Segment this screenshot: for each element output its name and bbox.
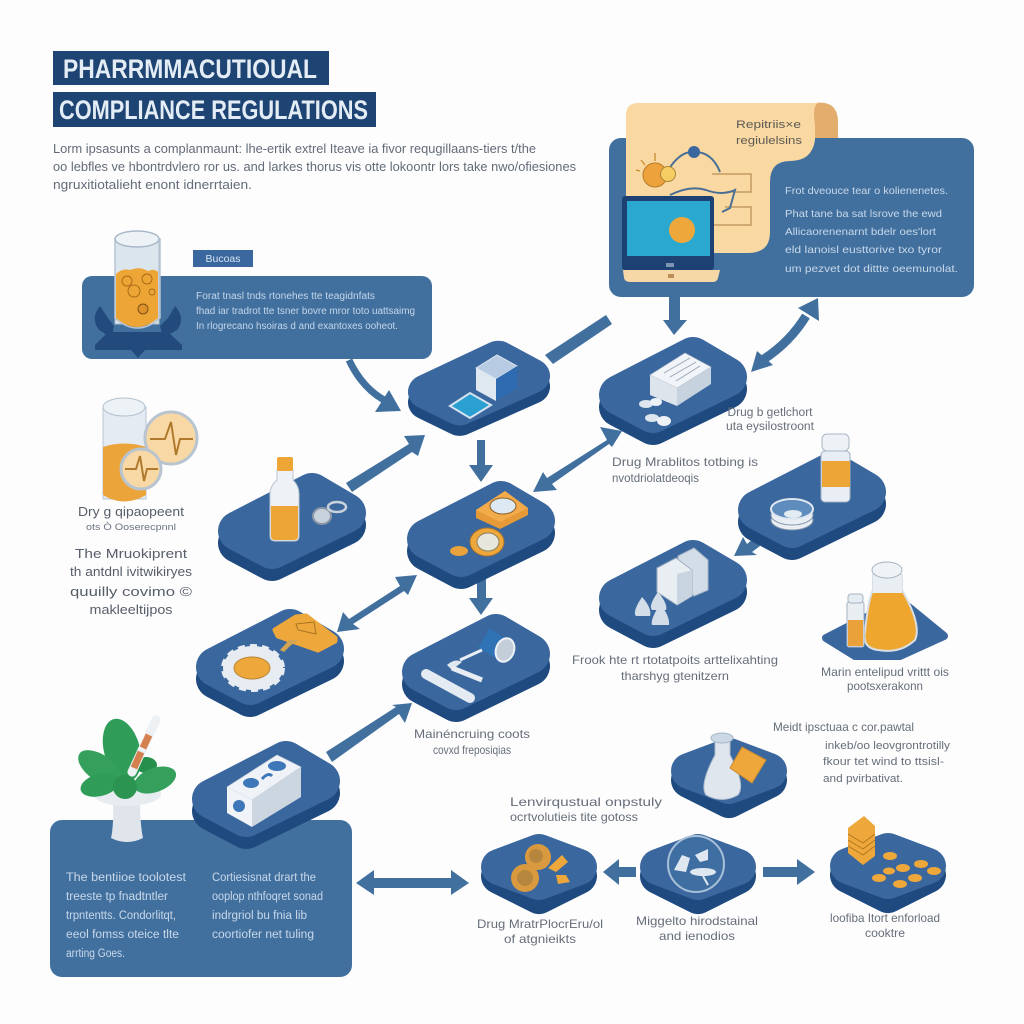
label: meidt: Meidt ipsctuaa c cor.pawtal	[773, 720, 914, 734]
panel: bottom left description: trpntentts. Condorlitqt,	[66, 910, 176, 922]
scroll paper: regiulelsins	[736, 135, 803, 147]
tile: stack and tablets	[848, 816, 941, 895]
label: environmental: Lenvirqustual onpstuly	[510, 795, 662, 809]
label: meidt: and pvirbativat.	[823, 773, 903, 785]
label: meidt	[773, 720, 951, 785]
tile: flask and label	[689, 733, 769, 800]
arrow: regulations panel down	[663, 297, 687, 335]
arrow: right tile to packages tile	[734, 537, 760, 556]
panel text: In rlogrecano hsoiras d and exantoxes ooheot.	[196, 321, 398, 332]
panel: bottom left description: eeol fomss oteice tlte	[66, 929, 179, 941]
intro paragraph: oo lebfles ve hbontrdvlero ror us. and larkes thorus vis otte lokoontr lors take nwo/ofiesiones	[53, 159, 576, 174]
arrow: gear tile double arrow	[337, 575, 417, 632]
label: drug material: of atgnieikts	[504, 932, 576, 946]
label: drug metabolites	[612, 455, 758, 485]
scroll paper: Repitriis×e	[736, 119, 801, 131]
label: drug material: Drug MratrPlocrEru/ol	[477, 917, 603, 931]
illustration: vial and coins	[103, 398, 197, 502]
panel text: Frot dveouce tear o kolienenetes.	[785, 185, 948, 197]
label: environmental	[510, 795, 662, 824]
label: manufacturing costs: Mainéncruing coots	[414, 727, 530, 741]
arrows	[326, 297, 819, 895]
label: miggelto	[636, 914, 758, 943]
label: marin	[821, 665, 949, 693]
label: drug metabolites: nvotdriolatdeoqis	[612, 471, 699, 485]
illustration: plant on pedestal	[72, 714, 180, 842]
label: drug batch: uta eysilostroont	[726, 421, 815, 433]
intro paragraph: Lorm ipsasunts a complanmaunt: lhe-ertik extrel Iteave ia fivor requgillaans-tiers t/the	[53, 141, 536, 156]
tile: centre with tablets	[427, 491, 535, 569]
text: drug component: makleeltijpos	[90, 602, 173, 617]
arrow: mid to right tile	[763, 859, 815, 885]
panel text: Phat tane ba sat lsrove the ewd	[785, 208, 942, 220]
panel: beaker callout	[82, 231, 432, 359]
intro paragraph: ngruxitiotalieht enont idnerrtaien.	[53, 177, 252, 192]
label: meidt: inkeb/oo leovgrontrotilly	[825, 740, 951, 752]
arrow: top right connector	[545, 315, 612, 364]
arrow: panel double horizontal	[356, 870, 469, 895]
panel text: Allicaorenenarnt bdelr oes'lort	[785, 226, 936, 238]
label: drug batch: Drug b getlchort	[728, 407, 813, 419]
label: drug batch	[726, 407, 815, 433]
tile: cookies	[499, 844, 579, 896]
label: meidt: fkour tet wind to ttsisl-	[823, 756, 944, 768]
panel: bottom left description: treeste tp fnadtntler	[66, 891, 168, 903]
label: drug metabolites: Drug Mrablitos totbing is	[612, 455, 758, 469]
scroll paper	[626, 103, 838, 253]
panel text	[785, 185, 958, 275]
label: marin: pootsxerakonn	[847, 679, 923, 693]
label: manufacturing costs	[414, 727, 530, 757]
text: drug component: The Mruokiprent	[75, 546, 187, 561]
tag: Bucoas	[193, 250, 253, 267]
tile: packages	[619, 548, 727, 628]
label: loofiba: loofiba Itort enforload	[830, 911, 940, 925]
label: loofiba: cooktre	[865, 926, 905, 940]
text: drug component	[70, 505, 193, 617]
label: manufacturing costs: covxd freposiqias	[433, 743, 511, 757]
title: PHARRMMACUTIOUAL	[63, 54, 317, 84]
arrow: regulations double arrow	[751, 298, 819, 372]
icon: large coin	[145, 412, 197, 464]
arrow: beaker panel to top tile	[349, 360, 401, 412]
label: tools: Frook hte rt rtotatpoits arttelixahting	[572, 653, 778, 667]
tile: top right with document box	[619, 353, 727, 426]
intro paragraph	[53, 141, 576, 192]
tile: canister and tube	[422, 634, 530, 702]
label: miggelto: and ienodios	[659, 929, 735, 943]
tile: magnifier circle	[658, 836, 738, 896]
text: drug component: th antdnl ivitwikiryes	[70, 564, 193, 579]
panel: bottom left description: coortiofer net tuling	[212, 929, 314, 941]
tile: bottle	[238, 457, 346, 561]
panel: bottom left description	[50, 820, 352, 977]
arrow: box tile to lower tile	[326, 703, 412, 762]
text: drug component: quuilly covimo ©	[70, 584, 193, 599]
label: loofiba	[830, 911, 940, 940]
panel text: um pezvet dot dittte oeemunolat.	[785, 263, 958, 275]
panel text: eld lanoisl eusttorive txo tyror	[785, 244, 943, 256]
panel: bottom left description: Cortiesisnat drart the	[212, 872, 316, 884]
tile: gear and tag	[216, 616, 335, 697]
arrow: top tile down	[469, 440, 493, 482]
icon: small coin	[121, 449, 161, 489]
panel: bottom left description: ooplop nthfoqret sonad	[212, 891, 323, 903]
text: drug component: ots Ò Ooserecpnnl	[86, 522, 176, 533]
panel text: Forat tnasl tnds rtonehes tte teagidnfats	[196, 291, 375, 302]
label: drug material	[477, 917, 603, 946]
panel text: fhad iar tradrot tte tsner bovre mror toto uattsaimg	[196, 306, 415, 317]
panel: bottom left description: The bentiioe toolotest	[66, 872, 187, 884]
panel: regulations with paper and laptop	[609, 103, 974, 297]
tile: right with jar and plates	[758, 434, 866, 540]
tile: top centre with cube	[427, 355, 531, 418]
label: tools	[572, 653, 778, 683]
arrow: centre tile down	[469, 578, 493, 615]
icon: small vial	[847, 594, 864, 647]
tile: flat flask base	[826, 562, 944, 656]
tag: Bucoas: Bucoas	[205, 253, 241, 265]
arrow: bottle tile to top tile	[346, 435, 425, 492]
arrow: centre double to right	[533, 427, 622, 492]
text: drug component: Dry g qipaopeent	[78, 505, 185, 519]
label: marin: Marin entelipud vrittt ois	[821, 665, 949, 679]
icon: laptop	[622, 196, 720, 282]
title	[53, 51, 376, 127]
icon: large flask	[865, 562, 917, 651]
arrow: mid to left tile	[603, 859, 636, 885]
icon: beaker on holder	[95, 231, 182, 358]
label: tools: tharshyg gtenitzern	[621, 669, 729, 683]
panel: bottom left description: indrgriol bu fnia lib	[212, 910, 307, 922]
panel text	[196, 291, 415, 332]
panel: bottom left description: arrting Goes.	[66, 948, 125, 960]
label: environmental: ocrtvolutieis tite gotoss	[510, 810, 638, 824]
label: miggelto: Miggelto hirodstainal	[636, 914, 758, 928]
tile: medicine box	[212, 755, 320, 829]
title: COMPLIANCE REGULATIONS	[59, 95, 368, 125]
